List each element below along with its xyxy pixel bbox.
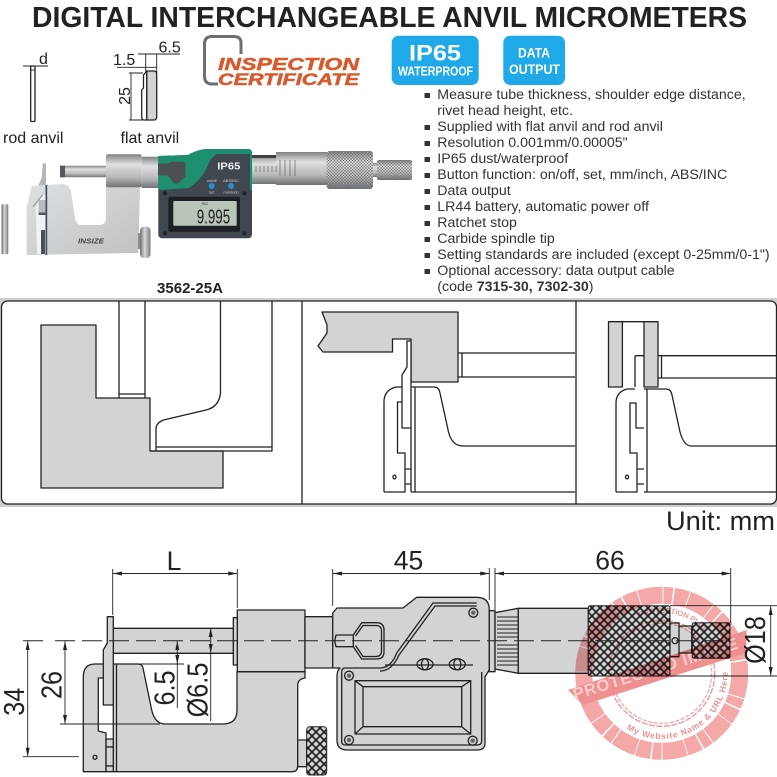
dimension L: L bbox=[167, 546, 181, 576]
flat anvil diagram: 1.5 bbox=[113, 52, 135, 69]
product photo: micrometer: ABS/INC bbox=[223, 178, 239, 183]
product photo: micrometer: on/off bbox=[207, 178, 218, 183]
dimension 6.5: 6.5 bbox=[148, 670, 181, 706]
badge: data output: DATA bbox=[518, 44, 550, 60]
clamp bbox=[353, 623, 384, 659]
measuring applications panel bbox=[0, 298, 777, 507]
feature list: Measure tube thickness, shoulder edge distance, bbox=[437, 87, 746, 103]
watermark stamp: PROTECTION PLUS bbox=[638, 608, 708, 630]
dimension diameter 18 bbox=[670, 606, 777, 676]
product photo: micrometer: 9.995 bbox=[197, 206, 230, 228]
badge: IP65 waterproof bbox=[392, 36, 479, 85]
badge: IP65 waterproof: WATERPROOF bbox=[398, 63, 473, 78]
feature list: Carbide spindle tip bbox=[437, 231, 555, 247]
flat anvil diagram: 6.5 bbox=[158, 40, 181, 56]
badge: IP65 waterproof: IP65 bbox=[409, 41, 461, 66]
head block bbox=[237, 610, 305, 672]
rod anvil diagram: rod anvil bbox=[3, 130, 63, 147]
dimension diameter 18: Ø18 bbox=[738, 616, 771, 664]
feature list: rivet head height, etc. bbox=[437, 103, 573, 119]
oval buttons bbox=[417, 659, 433, 670]
feature list: Optional accessory: data output cable bbox=[437, 263, 675, 279]
dimension diameter 6.5 bbox=[181, 628, 214, 721]
flat anvil diagram bbox=[113, 40, 181, 147]
inspection certificate logo: CERTIFICATE bbox=[218, 71, 360, 89]
feature list: Data output bbox=[437, 183, 511, 199]
feature list: Ratchet stop bbox=[437, 215, 517, 231]
product photo: micrometer bbox=[2, 149, 412, 258]
LCD bbox=[168, 197, 240, 232]
anvil holder bbox=[83, 664, 106, 772]
dimension L bbox=[113, 546, 237, 615]
rod anvil diagram: d bbox=[39, 51, 48, 68]
watermark stamp bbox=[568, 586, 748, 760]
display housing bbox=[333, 597, 489, 750]
spindle bbox=[60, 166, 106, 177]
barrel bbox=[106, 154, 142, 187]
dimension diameter 6.5: Ø6.5 bbox=[181, 663, 214, 717]
green cover bbox=[158, 149, 252, 190]
model number: 3562-25A bbox=[157, 280, 223, 297]
sleeve and thimble bbox=[489, 611, 495, 672]
dimension 45: 45 bbox=[394, 546, 423, 576]
frame bbox=[27, 184, 140, 255]
inspection certificate logo bbox=[204, 36, 360, 89]
clamp lever bbox=[158, 162, 186, 184]
anvil tip bbox=[38, 163, 46, 186]
spindle bbox=[113, 628, 233, 653]
thimble bbox=[327, 151, 373, 189]
title: DIGITAL INTERCHANGEABLE ANVIL MICROMETERS bbox=[32, 2, 747, 34]
badge: data output: OUTPUT bbox=[509, 61, 560, 77]
product photo: micrometer: INC bbox=[202, 201, 209, 206]
dimension 26 bbox=[35, 641, 160, 724]
flat anvil diagram: 25 bbox=[117, 87, 134, 105]
product photo: micrometer: set bbox=[209, 190, 215, 194]
dimension 26: 26 bbox=[35, 671, 68, 699]
feature list: Resolution 0.001mm/0.00005" bbox=[437, 135, 628, 151]
anvil slot bbox=[36, 195, 46, 254]
panel: shoulder edge distance bbox=[318, 312, 575, 492]
inspection certificate logo: INSPECTION bbox=[218, 54, 359, 74]
rod anvil diagram bbox=[3, 51, 63, 147]
dimension 66: 66 bbox=[595, 546, 625, 576]
watermark stamp: My Website Name & URL Here bbox=[627, 672, 728, 739]
feature list: (code 7315-30, 7302-30) bbox=[437, 279, 594, 295]
unit label: Unit: mm bbox=[666, 506, 775, 536]
panel: tube thickness bbox=[41, 301, 272, 488]
feature list: Button function: on/off, set, mm/inch, ABS/INC bbox=[437, 167, 727, 183]
locking knob bbox=[298, 740, 307, 767]
locking knob bbox=[138, 233, 141, 249]
feature list: Setting standards are included (except 0-25mm/0-1") bbox=[437, 247, 770, 263]
flat anvil diagram: flat anvil bbox=[120, 130, 179, 147]
product photo: micrometer: INSIZE bbox=[78, 236, 105, 246]
feature list: LR44 battery, automatic power off bbox=[437, 199, 649, 215]
dimension 34 bbox=[0, 641, 79, 757]
dimension 66 bbox=[495, 546, 731, 623]
loose rod anvil bbox=[2, 204, 8, 254]
scale sleeve bbox=[251, 155, 278, 184]
watermark stamp: PROTECTED IMAGE bbox=[571, 635, 740, 704]
dimension drawing bbox=[0, 546, 777, 775]
feature list: IP65 dust/waterproof bbox=[437, 151, 568, 167]
dimension 45 bbox=[333, 546, 489, 606]
panel: rivet head height bbox=[608, 322, 777, 492]
center line bbox=[23, 640, 730, 642]
badge: data output bbox=[503, 36, 565, 85]
head housing bbox=[158, 149, 252, 238]
product photo: micrometer: IP65 bbox=[217, 161, 241, 172]
product photo: micrometer: mm/inch bbox=[223, 190, 239, 194]
frame bbox=[113, 664, 305, 772]
dimension 6.5 bbox=[138, 641, 184, 708]
feature list: Supplied with flat anvil and rod anvil bbox=[437, 119, 663, 135]
feature list bbox=[424, 87, 770, 295]
